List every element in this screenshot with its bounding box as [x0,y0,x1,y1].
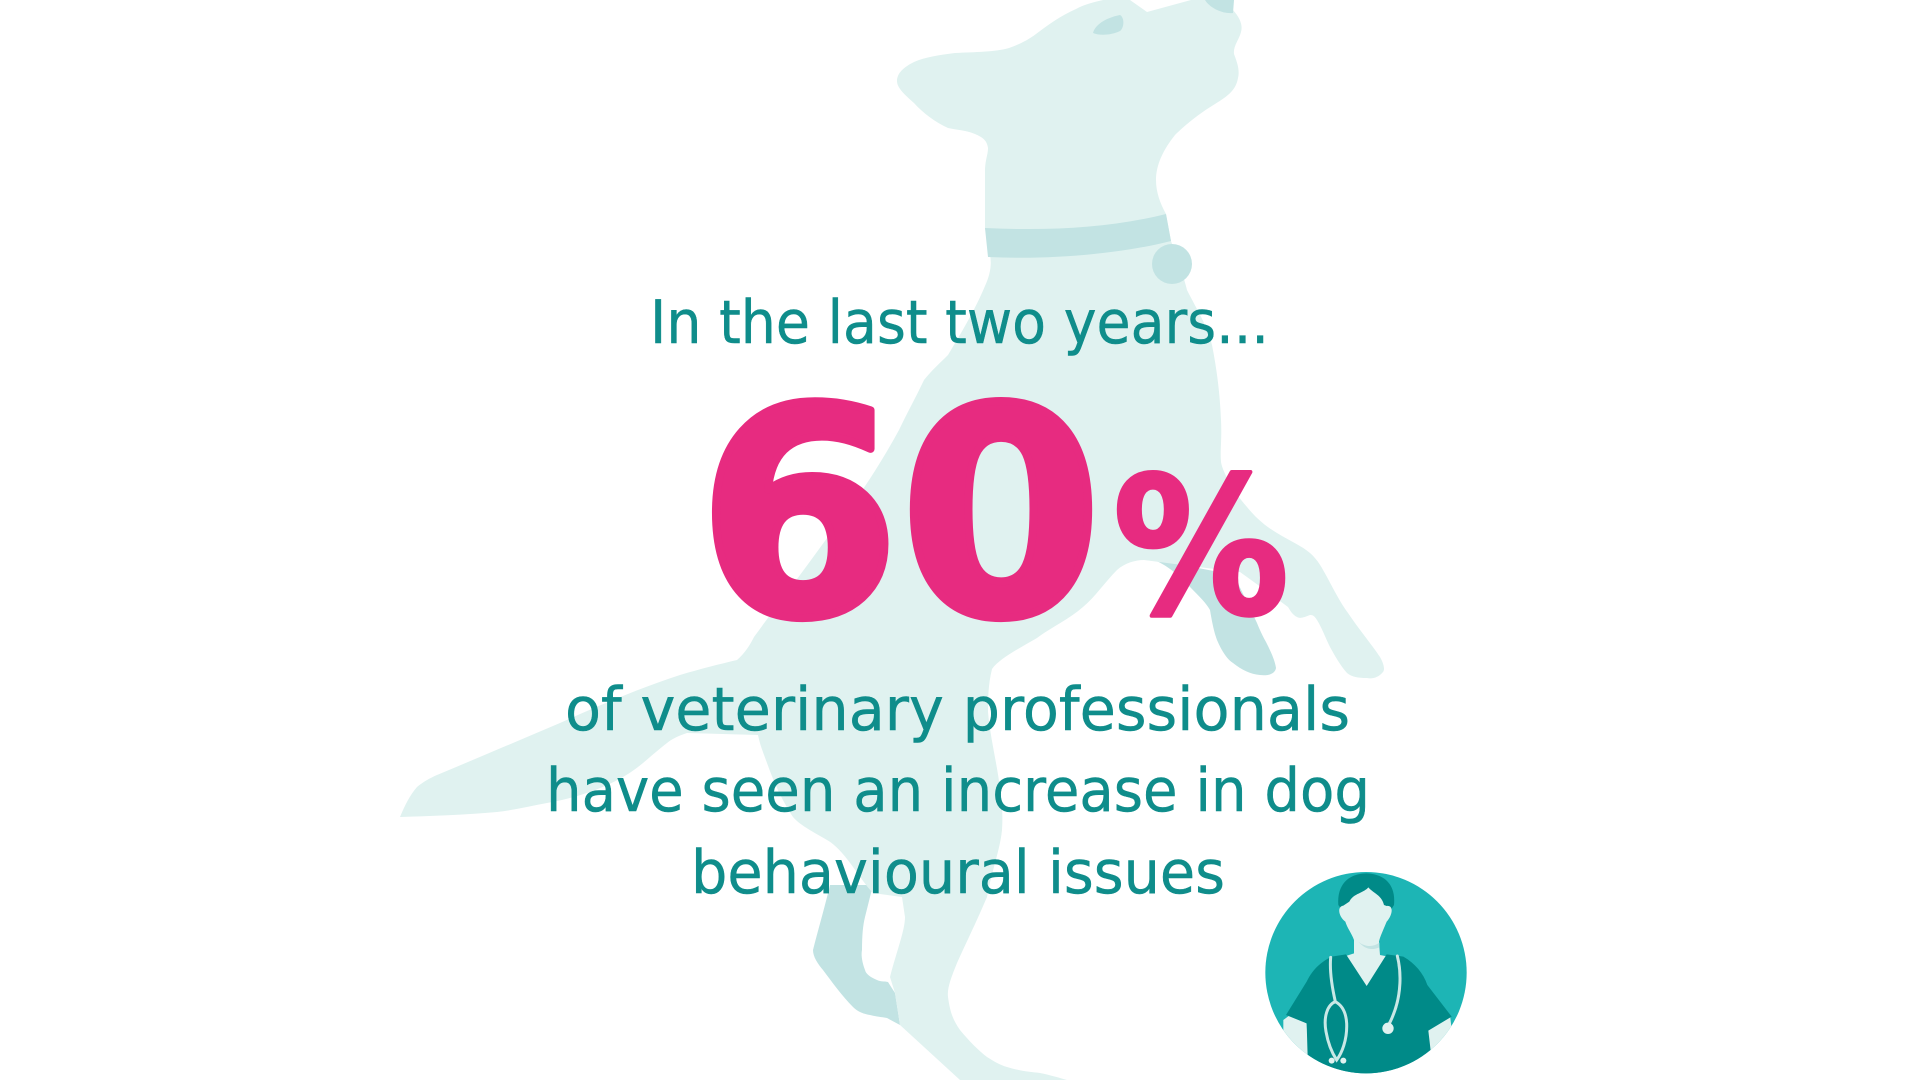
vet neck shadow [1358,942,1379,949]
dog far back leg [813,885,900,1025]
stethoscope [1325,956,1400,1060]
dog collar tag [1152,244,1192,284]
text: description [546,675,1370,908]
dog eye [1093,15,1123,35]
icon: vet in circle [1265,872,1467,1080]
big number 60% [698,348,1289,682]
percent sign: % [1113,437,1289,658]
stethoscope chest piece [1382,1023,1394,1034]
vet hair [1338,873,1394,909]
vet neck and face [1339,887,1392,988]
white gap at top of muzzle [1130,0,1191,12]
line 1: of veterinary professionals [565,675,1350,745]
circle background [1265,872,1467,1073]
line 3: behavioural issues [691,838,1225,908]
vet arms [1283,1016,1452,1056]
dog nose [1205,0,1234,13]
dog far front paw [1147,558,1276,675]
line 2: have seen an increase in dog [546,756,1370,826]
icon: dog silhouette [400,0,1384,1080]
number 60: 60 [698,348,1102,682]
text: intro line: In the last two years... [650,288,1269,358]
dog collar [985,214,1171,258]
dog body [400,0,1384,1080]
vet scrubs [1286,954,1452,1080]
stethoscope ear tips [1329,1058,1346,1064]
